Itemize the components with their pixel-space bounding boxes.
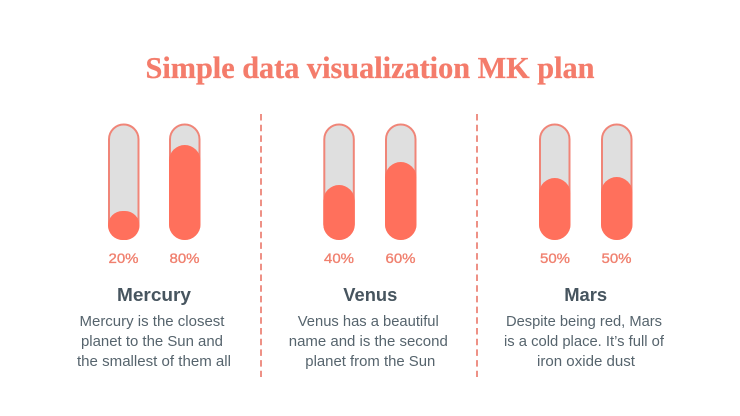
bar: Mars 50% right: 50% — [602, 250, 632, 266]
bar: Venus 40% — [323, 124, 355, 266]
bar: Mercury 20%: 20% — [108, 250, 138, 266]
text: Mercury description: Mercury is the closest — [79, 314, 224, 330]
bar: Mercury 20% — [108, 124, 140, 266]
title: Simple data visualization MK plan — [146, 50, 594, 85]
bar: Venus 60%: 60% — [386, 250, 416, 266]
text: Venus description: planet from the Sun — [305, 354, 435, 370]
text: Venus description: name and is the second — [289, 334, 448, 350]
bar: Mars 50% left — [539, 124, 570, 266]
panel: Mercury — [77, 124, 231, 370]
heading: Mars: Mars — [564, 284, 607, 305]
bar: Mercury 80% — [169, 124, 200, 266]
heading: Venus: Venus — [343, 284, 397, 305]
bar: Venus 60% — [385, 124, 416, 266]
bar: Mars 50% left: 50% — [540, 250, 570, 266]
panel: Venus — [289, 124, 452, 370]
heading: Mercury: Mercury — [117, 284, 192, 305]
text: Mars description: is a cold place. It’s full of — [504, 334, 665, 350]
bar: Mars 50% right — [601, 124, 632, 266]
text: Mercury description: planet to the Sun and — [81, 334, 223, 350]
text: Mars description: iron oxide dust — [537, 354, 635, 370]
panel: Mars — [504, 124, 668, 370]
text: Mercury description: the smallest of them all — [77, 354, 231, 370]
bar: Venus 40%: 40% — [324, 250, 354, 266]
text: Venus description: Venus has a beautiful — [298, 314, 439, 330]
bar: Mercury 80%: 80% — [170, 250, 200, 266]
text: Mars description: Despite being red, Mars — [506, 314, 662, 330]
